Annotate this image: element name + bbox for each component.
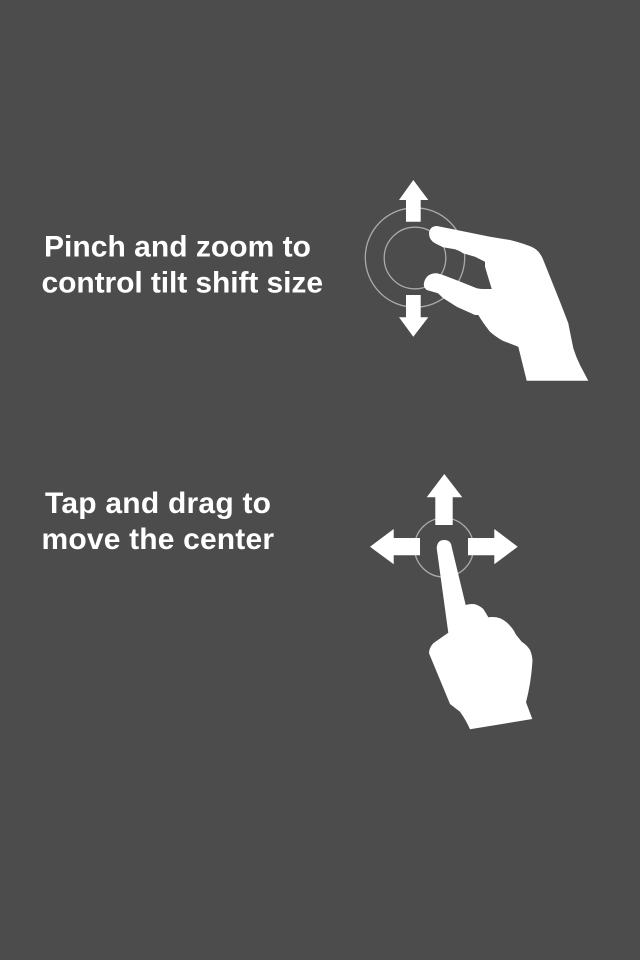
arrow: down (399, 295, 428, 337)
arrow: up (399, 180, 428, 222)
arrow: right (468, 529, 518, 564)
outer dial ring (365, 208, 465, 307)
heading: tap and drag: move the center (42, 523, 274, 556)
heading: tap and drag: Tap and drag to (45, 487, 271, 520)
heading: pinch and zoom: control tilt shift size (42, 266, 323, 300)
arrow: left (370, 529, 420, 564)
icon: pinch gesture (365, 180, 588, 381)
icon: tap and drag gesture (370, 474, 532, 729)
icon: pinching hand (424, 226, 588, 381)
arrow: up (427, 474, 462, 525)
heading: pinch and zoom: Pinch and zoom to (44, 230, 311, 264)
heading: pinch and zoom (42, 230, 323, 300)
heading: tap and drag (42, 487, 274, 556)
inner dial ring (384, 227, 446, 289)
icon: pointing hand (429, 540, 532, 729)
dial ring (414, 518, 474, 577)
